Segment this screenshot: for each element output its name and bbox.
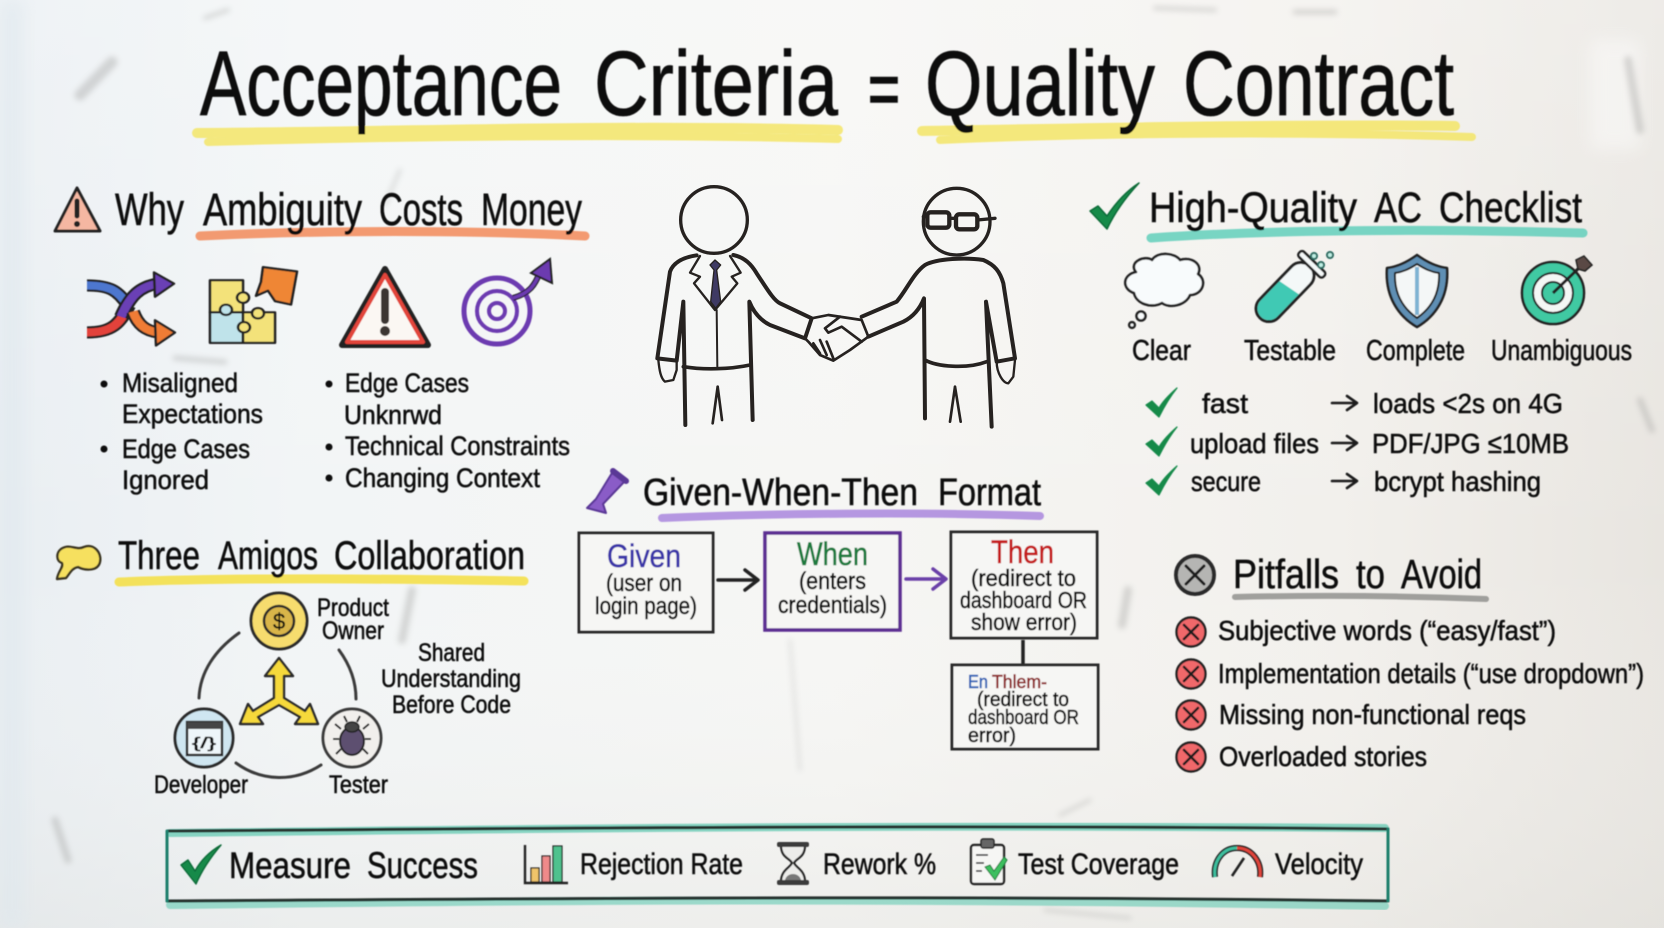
heading: Checklist: [1439, 184, 1582, 232]
box: then continued: En: [968, 672, 988, 692]
heading: Amigos: [218, 534, 318, 578]
metric: rework: [777, 842, 936, 885]
heading: Given-When-Then: [643, 472, 918, 514]
label: shared understanding: Understanding: [381, 665, 521, 693]
box: given: login page): [595, 593, 697, 620]
heading: Money: [481, 184, 582, 235]
arrow: given to when: [718, 570, 758, 590]
bullet list right: Changing Context: [345, 463, 540, 493]
title: [197, 33, 1472, 142]
icon: test tube: [1248, 250, 1333, 330]
box: then: [951, 532, 1097, 638]
title text: Acceptance: [200, 33, 562, 135]
label: product owner: [317, 594, 389, 645]
heading: Three: [118, 534, 200, 578]
box: then continued: error): [968, 725, 1016, 747]
box: when: (enters: [799, 568, 866, 595]
metric: rejection rate: Rejection Rate: [580, 848, 743, 881]
panel: pitfalls to avoid: [1176, 551, 1644, 772]
heading: Format: [938, 472, 1041, 514]
label: testable: Testable: [1244, 335, 1336, 367]
panel: high-quality AC checklist: [1090, 183, 1632, 497]
title text: Contract: [1183, 33, 1454, 135]
figure: business person in suit: [657, 187, 812, 425]
box: then: show error): [971, 609, 1077, 635]
heading: Avoid: [1401, 551, 1482, 597]
panel: three amigos collaboration: [57, 534, 525, 799]
box: when: [765, 533, 900, 630]
icon: purple target with arrow: [464, 259, 552, 344]
icon: yellow three-way arrow: [240, 658, 318, 724]
checklist row: secure: bcrypt hashing: [1374, 466, 1541, 497]
pitfall 4: Overloaded stories: [1219, 741, 1427, 772]
label: shared understanding: Before Code: [392, 691, 511, 719]
icon: product owner coin: $: [273, 609, 285, 634]
label: complete: Complete: [1366, 335, 1465, 367]
box: given: (user on: [606, 570, 682, 597]
checklist row: fast: fast: [1202, 388, 1248, 419]
label: product owner: Product: [317, 594, 389, 622]
title text: Criteria: [594, 33, 839, 135]
bullet list left: [100, 368, 263, 495]
banner: measure success: [167, 827, 1388, 906]
heading underline: [200, 232, 585, 236]
icon: small warning triangle: [55, 188, 100, 231]
heading: Why: [115, 184, 184, 235]
metric: velocity: [1215, 848, 1363, 881]
figure: handshake hands: [805, 315, 868, 361]
icon: large green check: [181, 845, 221, 884]
box: given: Given: [607, 538, 681, 574]
checklist row: secure: secure: [1191, 466, 1261, 497]
metric: test coverage: [971, 839, 1179, 884]
checklist row: upload files: PDF/JPG ≤10MB: [1372, 428, 1569, 459]
label: product owner: Owner: [322, 617, 384, 645]
heading: High-Quality: [1149, 184, 1357, 232]
heading underline: [1151, 230, 1583, 238]
heading: [1233, 551, 1482, 597]
bullet list left: Edge Cases: [122, 434, 250, 464]
checklist row: fast: [1146, 388, 1563, 419]
title highlight: yellow underlines: [197, 125, 1472, 142]
box: then: dashboard OR: [960, 587, 1087, 613]
label: clear: Clear: [1132, 335, 1191, 367]
bullet list left: Misaligned: [122, 368, 238, 398]
icon: purple marker: [587, 471, 626, 513]
title text: [200, 33, 1454, 135]
icon: product owner coin: [251, 593, 307, 649]
icon: thought cloud: [1125, 254, 1203, 328]
bullet list right: Unknrwd: [344, 400, 442, 430]
label: developer: Developer: [154, 771, 248, 799]
heading: Costs: [379, 184, 463, 235]
banner frame: [167, 827, 1388, 906]
bullet list right: Technical Constraints: [345, 431, 570, 461]
box: then continued: dashboard OR: [968, 707, 1079, 729]
icon: red warning triangle: [342, 269, 428, 345]
heading: Collaboration: [334, 534, 525, 578]
metric: rework: Rework %: [823, 848, 936, 881]
label: tester: Tester: [329, 771, 388, 799]
box: then: Then: [991, 534, 1054, 570]
checklist row: fast: loads <2s on 4G: [1373, 388, 1563, 419]
box: when: credentials): [778, 592, 887, 619]
checklist row: upload files: [1146, 427, 1569, 459]
icon: developer window: [175, 709, 233, 767]
box: then: (redirect to: [971, 565, 1076, 591]
icon: shuffle arrows: [87, 272, 175, 346]
heading: AC: [1374, 184, 1422, 232]
icon: yellow speech blob: [57, 546, 100, 579]
panel: given-when-then format: [579, 471, 1098, 749]
title text: Quality: [925, 33, 1155, 135]
heading underline: [662, 514, 1040, 518]
box: when: When: [797, 536, 868, 572]
heading: [115, 184, 582, 235]
connecting arcs: [199, 633, 356, 778]
bullet list right: [326, 368, 570, 493]
heading underline: [1235, 596, 1486, 599]
heading: to: [1356, 551, 1385, 597]
icon: shield: [1387, 255, 1447, 327]
label: measure success: Measure: [229, 845, 351, 886]
connector: then to second box: [1021, 640, 1025, 664]
icon: puzzle pieces: [210, 267, 297, 343]
label: measure success: [229, 845, 478, 886]
panel: why ambiguity costs money: [55, 184, 585, 495]
pitfall 1: Subjective words (“easy/fast”): [1218, 615, 1556, 646]
heading: [1149, 184, 1582, 232]
box: then continued: [952, 665, 1098, 749]
heading: Pitfalls: [1233, 551, 1339, 597]
illustration: handshake figures: [657, 187, 1015, 427]
icon: tester bug: [323, 709, 381, 767]
label: shared understanding: Shared: [418, 639, 485, 667]
metric: test coverage: Test Coverage: [1018, 848, 1179, 881]
bullet list left: Ignored: [122, 465, 209, 495]
box: then continued: (redirect to: [977, 689, 1069, 711]
pitfall 3: Missing non-functional reqs: [1219, 699, 1526, 730]
label: measure success: Success: [367, 845, 478, 886]
label: shared understanding: [381, 639, 521, 719]
metric: velocity: Velocity: [1275, 848, 1363, 881]
box: given: [579, 533, 713, 632]
box: then continued: Thlem-: [992, 672, 1047, 692]
icon: gray x circle: [1176, 556, 1214, 594]
metric: rejection rate: [525, 845, 743, 883]
bullet list right: Edge Cases: [345, 368, 469, 398]
checklist row: secure: [1146, 466, 1541, 497]
arrow: when to then: [906, 569, 946, 589]
icon: green check: [1090, 183, 1139, 229]
heading: Ambiguity: [203, 184, 362, 235]
title text: =: [868, 47, 900, 132]
heading: [118, 534, 525, 578]
icon: developer window: {/}: [192, 735, 216, 752]
checklist row: upload files: upload files: [1190, 428, 1319, 459]
heading underline: [119, 579, 524, 582]
bullet list left: Expectations: [122, 399, 263, 429]
figure: developer with glasses: [862, 188, 1015, 427]
icon: green target: [1522, 256, 1592, 324]
